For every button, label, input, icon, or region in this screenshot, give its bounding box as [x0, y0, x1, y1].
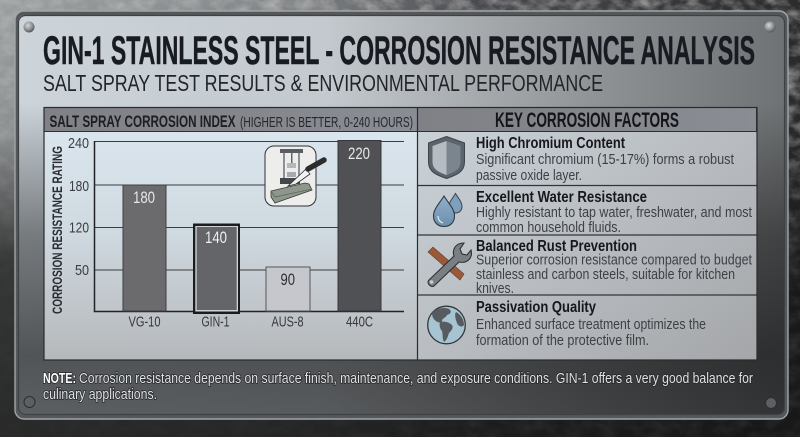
x axis labels: VG-10 — [128, 314, 160, 330]
factor: excellent water resistance: Highly resistant to tap water, freshwater, and most — [476, 204, 753, 221]
chart header: SALT SPRAY CORROSION INDEX — [50, 112, 236, 131]
factor: excellent water resistance: common household fluids. — [476, 219, 621, 236]
subtitle: SALT SPRAY TEST RESULTS & ENVIRONMENTAL PERFORMANCE — [43, 70, 603, 96]
y axis tick labels: 180 — [69, 178, 89, 195]
x axis labels: 440C — [346, 314, 373, 330]
note: NOTE: — [43, 370, 76, 387]
factor: high chromium content: Significant chromium (15-17%) forms a robust — [476, 151, 735, 168]
chart header — [44, 108, 418, 132]
factor: high chromium content — [428, 135, 735, 184]
bar: 440C: 220 — [348, 145, 370, 163]
note — [43, 370, 753, 403]
factor: high chromium content: passive oxide layer. — [476, 167, 582, 184]
factor: balanced rust prevention — [428, 238, 753, 297]
y axis title: CORROSION RESISTANCE RATING — [49, 146, 65, 314]
bar: VG-10 — [123, 185, 166, 311]
chart header: (HIGHER IS BETTER, 0-240 HOURS) — [240, 114, 413, 131]
factor: passivation quality — [428, 299, 706, 349]
x axis labels: GIN-1 — [202, 314, 230, 330]
panel: key corrosion factors — [418, 107, 757, 360]
bar: AUS-8: 90 — [280, 271, 295, 289]
factor: passivation quality: Passivation Quality — [476, 299, 596, 316]
factor: balanced rust prevention: knives. — [476, 280, 514, 297]
bar: VG-10: 180 — [133, 189, 155, 207]
y axis tick labels: 50 — [75, 262, 89, 279]
panel: salt spray corrosion chart — [44, 107, 418, 360]
x axis labels: AUS-8 — [272, 314, 304, 330]
factor: balanced rust prevention: Superior corrosion resistance compared to budget — [476, 252, 753, 268]
icon: water drops — [434, 194, 462, 226]
y axis tick labels: 120 — [69, 220, 89, 236]
icon: salt spray tester and knife — [265, 146, 324, 206]
icon: globe — [428, 306, 465, 344]
bar: GIN-1 highlighted: 140 — [205, 229, 227, 247]
factor: passivation quality: formation of the protective film. — [476, 332, 649, 349]
factor: excellent water resistance — [434, 189, 753, 236]
icon: shield — [428, 136, 464, 178]
factor: excellent water resistance: Excellent Water Resistance — [476, 189, 647, 206]
factors header: KEY CORROSION FACTORS — [495, 109, 679, 132]
bar: GIN-1 highlighted — [193, 224, 240, 314]
x axis labels — [128, 314, 373, 330]
icon: wrench over rusty bar — [428, 243, 471, 286]
factor: passivation quality: Enhanced surface treatment optimizes the — [476, 316, 706, 333]
factor: high chromium content: High Chromium Content — [476, 135, 626, 152]
factors header — [418, 108, 756, 132]
y axis tick labels — [68, 135, 89, 279]
factor: balanced rust prevention: stainless and carbon steels, suitable for kitchen — [476, 266, 735, 283]
y axis tick labels: 240 — [68, 135, 89, 152]
bar: 440C — [338, 140, 381, 311]
note: culinary applications. — [43, 386, 157, 403]
bar: AUS-8 — [266, 267, 310, 311]
factor: balanced rust prevention: Balanced Rust Prevention — [476, 238, 637, 255]
